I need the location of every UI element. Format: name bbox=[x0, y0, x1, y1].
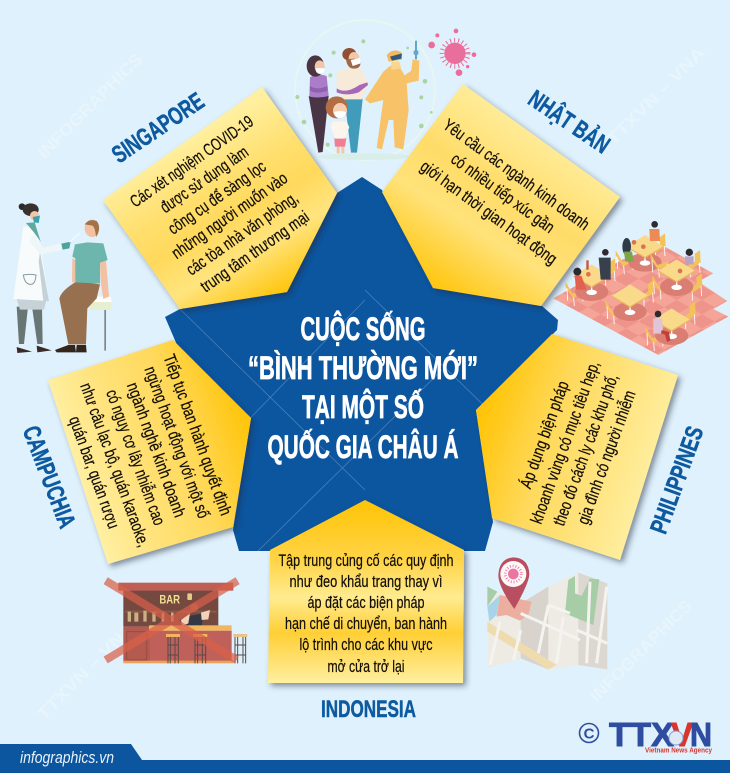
central star bbox=[165, 177, 558, 551]
title bbox=[248, 311, 478, 465]
text: Indonesia bbox=[278, 551, 454, 676]
panel: Singapore bbox=[103, 87, 337, 309]
text: Indonesia: áp đặt các biện pháp bbox=[308, 593, 424, 612]
illustration: distanced restaurant tables bbox=[553, 221, 728, 355]
woman bbox=[307, 55, 329, 153]
text: Singapore: trung tâm thương mại bbox=[197, 207, 313, 296]
table centre bbox=[606, 280, 654, 324]
watermarks: TTXVN – VNA bbox=[33, 618, 139, 724]
text: Campuchia: như câu lạc bộ, quán karaoke, bbox=[76, 380, 153, 549]
bar sign: BAR bbox=[159, 592, 180, 606]
panel: Philippines bbox=[476, 334, 678, 560]
text: Singapore: các tòa nhà văn phòng, bbox=[183, 188, 302, 279]
copyright symbol: C bbox=[584, 726, 595, 742]
star watermark lines bbox=[180, 290, 540, 551]
man bbox=[337, 48, 368, 153]
logo: TTXVN: V bbox=[671, 716, 693, 753]
text: Nhật Bản: có nhiều tiếp xúc gần bbox=[447, 149, 558, 237]
table bottom bbox=[646, 302, 696, 351]
footer url: infographics.vn bbox=[20, 748, 114, 767]
text: Singapore: những người muốn vào bbox=[168, 169, 291, 263]
title: “BÌNH THƯỜNG MỚI” bbox=[248, 350, 478, 386]
text: Nhật Bản bbox=[412, 115, 593, 272]
panel: Campuchia bbox=[48, 340, 251, 564]
panel: Indonesia bbox=[268, 500, 464, 683]
table left bbox=[566, 249, 616, 306]
text: Singapore: công cụ để sàng lọc bbox=[164, 157, 270, 238]
illustration: closed bar bbox=[106, 581, 247, 663]
text: Indonesia: mở cửa trở lại bbox=[328, 657, 404, 676]
sparkles bbox=[295, 39, 433, 147]
text: Indonesia: như đeo khẩu trang thay vì bbox=[290, 572, 442, 591]
text: Campuchia: có nguy cơ lây nhiễm cao bbox=[102, 387, 169, 528]
label: Indonesia: INDONESIA bbox=[321, 696, 416, 723]
text: Campuchia: quán bar, quán rượu bbox=[65, 414, 123, 531]
patient bbox=[55, 220, 109, 352]
illustration: map with virus pin bbox=[487, 557, 607, 669]
logo: TTXVN bbox=[609, 716, 712, 754]
text: Indonesia: Tập trung củng cố các quy định bbox=[278, 551, 454, 570]
label: Campuchia: CAMPUCHIA bbox=[17, 422, 80, 532]
doctor bbox=[13, 203, 80, 353]
label: Nhật Bản: NHẬT BẢN bbox=[523, 84, 616, 159]
text: Indonesia: lộ trình cho các khu vực bbox=[300, 635, 433, 654]
bartender bbox=[181, 603, 210, 626]
title: QUỐC GIA CHÂU Á bbox=[268, 429, 458, 465]
footer bar bbox=[0, 744, 730, 773]
text: Philippines: Áp dụng biện pháp bbox=[516, 378, 573, 491]
text: Campuchia: ngừng hoạt động với một số bbox=[141, 364, 213, 521]
text: Singapore: Các xét nghiệm COVID-19 bbox=[126, 112, 257, 211]
text: Singapore: được sử dụng làm bbox=[157, 142, 252, 217]
label: Philippines: PHILIPPINES bbox=[646, 423, 709, 537]
text: Philippines bbox=[506, 351, 645, 541]
watermarks: INFOGRAPHICS bbox=[34, 50, 146, 162]
text: Campuchia bbox=[56, 350, 236, 557]
text: Campuchia: ngành nghề kinh doanh bbox=[123, 380, 189, 520]
text: Indonesia: hạn chế di chuyển, ban hành bbox=[285, 614, 447, 633]
logo: TTXVN: Vietnam News Agency bbox=[645, 748, 712, 754]
logo: TTXVN: TTX bbox=[609, 716, 674, 753]
child bbox=[326, 96, 349, 153]
panel: Nhật Bản bbox=[382, 84, 620, 306]
title: CUỘC SỐNG bbox=[300, 311, 426, 347]
text: Nhật Bản: giới hạn thời gian hoạt động bbox=[417, 157, 561, 269]
text: Nhật Bản: Yêu cầu các ngành kinh doanh bbox=[440, 115, 593, 234]
table right bbox=[651, 249, 702, 301]
copyright symbol bbox=[580, 724, 598, 742]
red cross bbox=[106, 581, 238, 660]
table top bbox=[616, 221, 666, 274]
virus bbox=[428, 29, 476, 76]
logo: TTXVN: N bbox=[690, 716, 712, 753]
watermarks: TTXVN – VNA bbox=[603, 43, 709, 149]
illustration: doctor testing a patient bbox=[13, 203, 112, 353]
stool bbox=[73, 297, 112, 351]
text: Singapore bbox=[126, 112, 320, 301]
text: Campuchia: Tiếp tục ban hành quyết định bbox=[159, 352, 235, 518]
label: Singapore: SINGAPORE bbox=[107, 88, 209, 169]
text: Philippines: gia đình có người nhiễm bbox=[574, 388, 640, 527]
text: Philippines: khoanh vùng có mục tiêu hẹp, bbox=[527, 358, 604, 526]
bar stools bbox=[168, 637, 246, 663]
illustration: family and medic with virus bbox=[295, 20, 476, 160]
text: Philippines: theo đó cách ly các khu phố, bbox=[550, 371, 622, 528]
title: TẠI MỘT SỐ bbox=[302, 389, 424, 425]
medic in protective suit bbox=[365, 41, 419, 149]
watermarks: INFOGRAPHICS bbox=[586, 596, 696, 706]
